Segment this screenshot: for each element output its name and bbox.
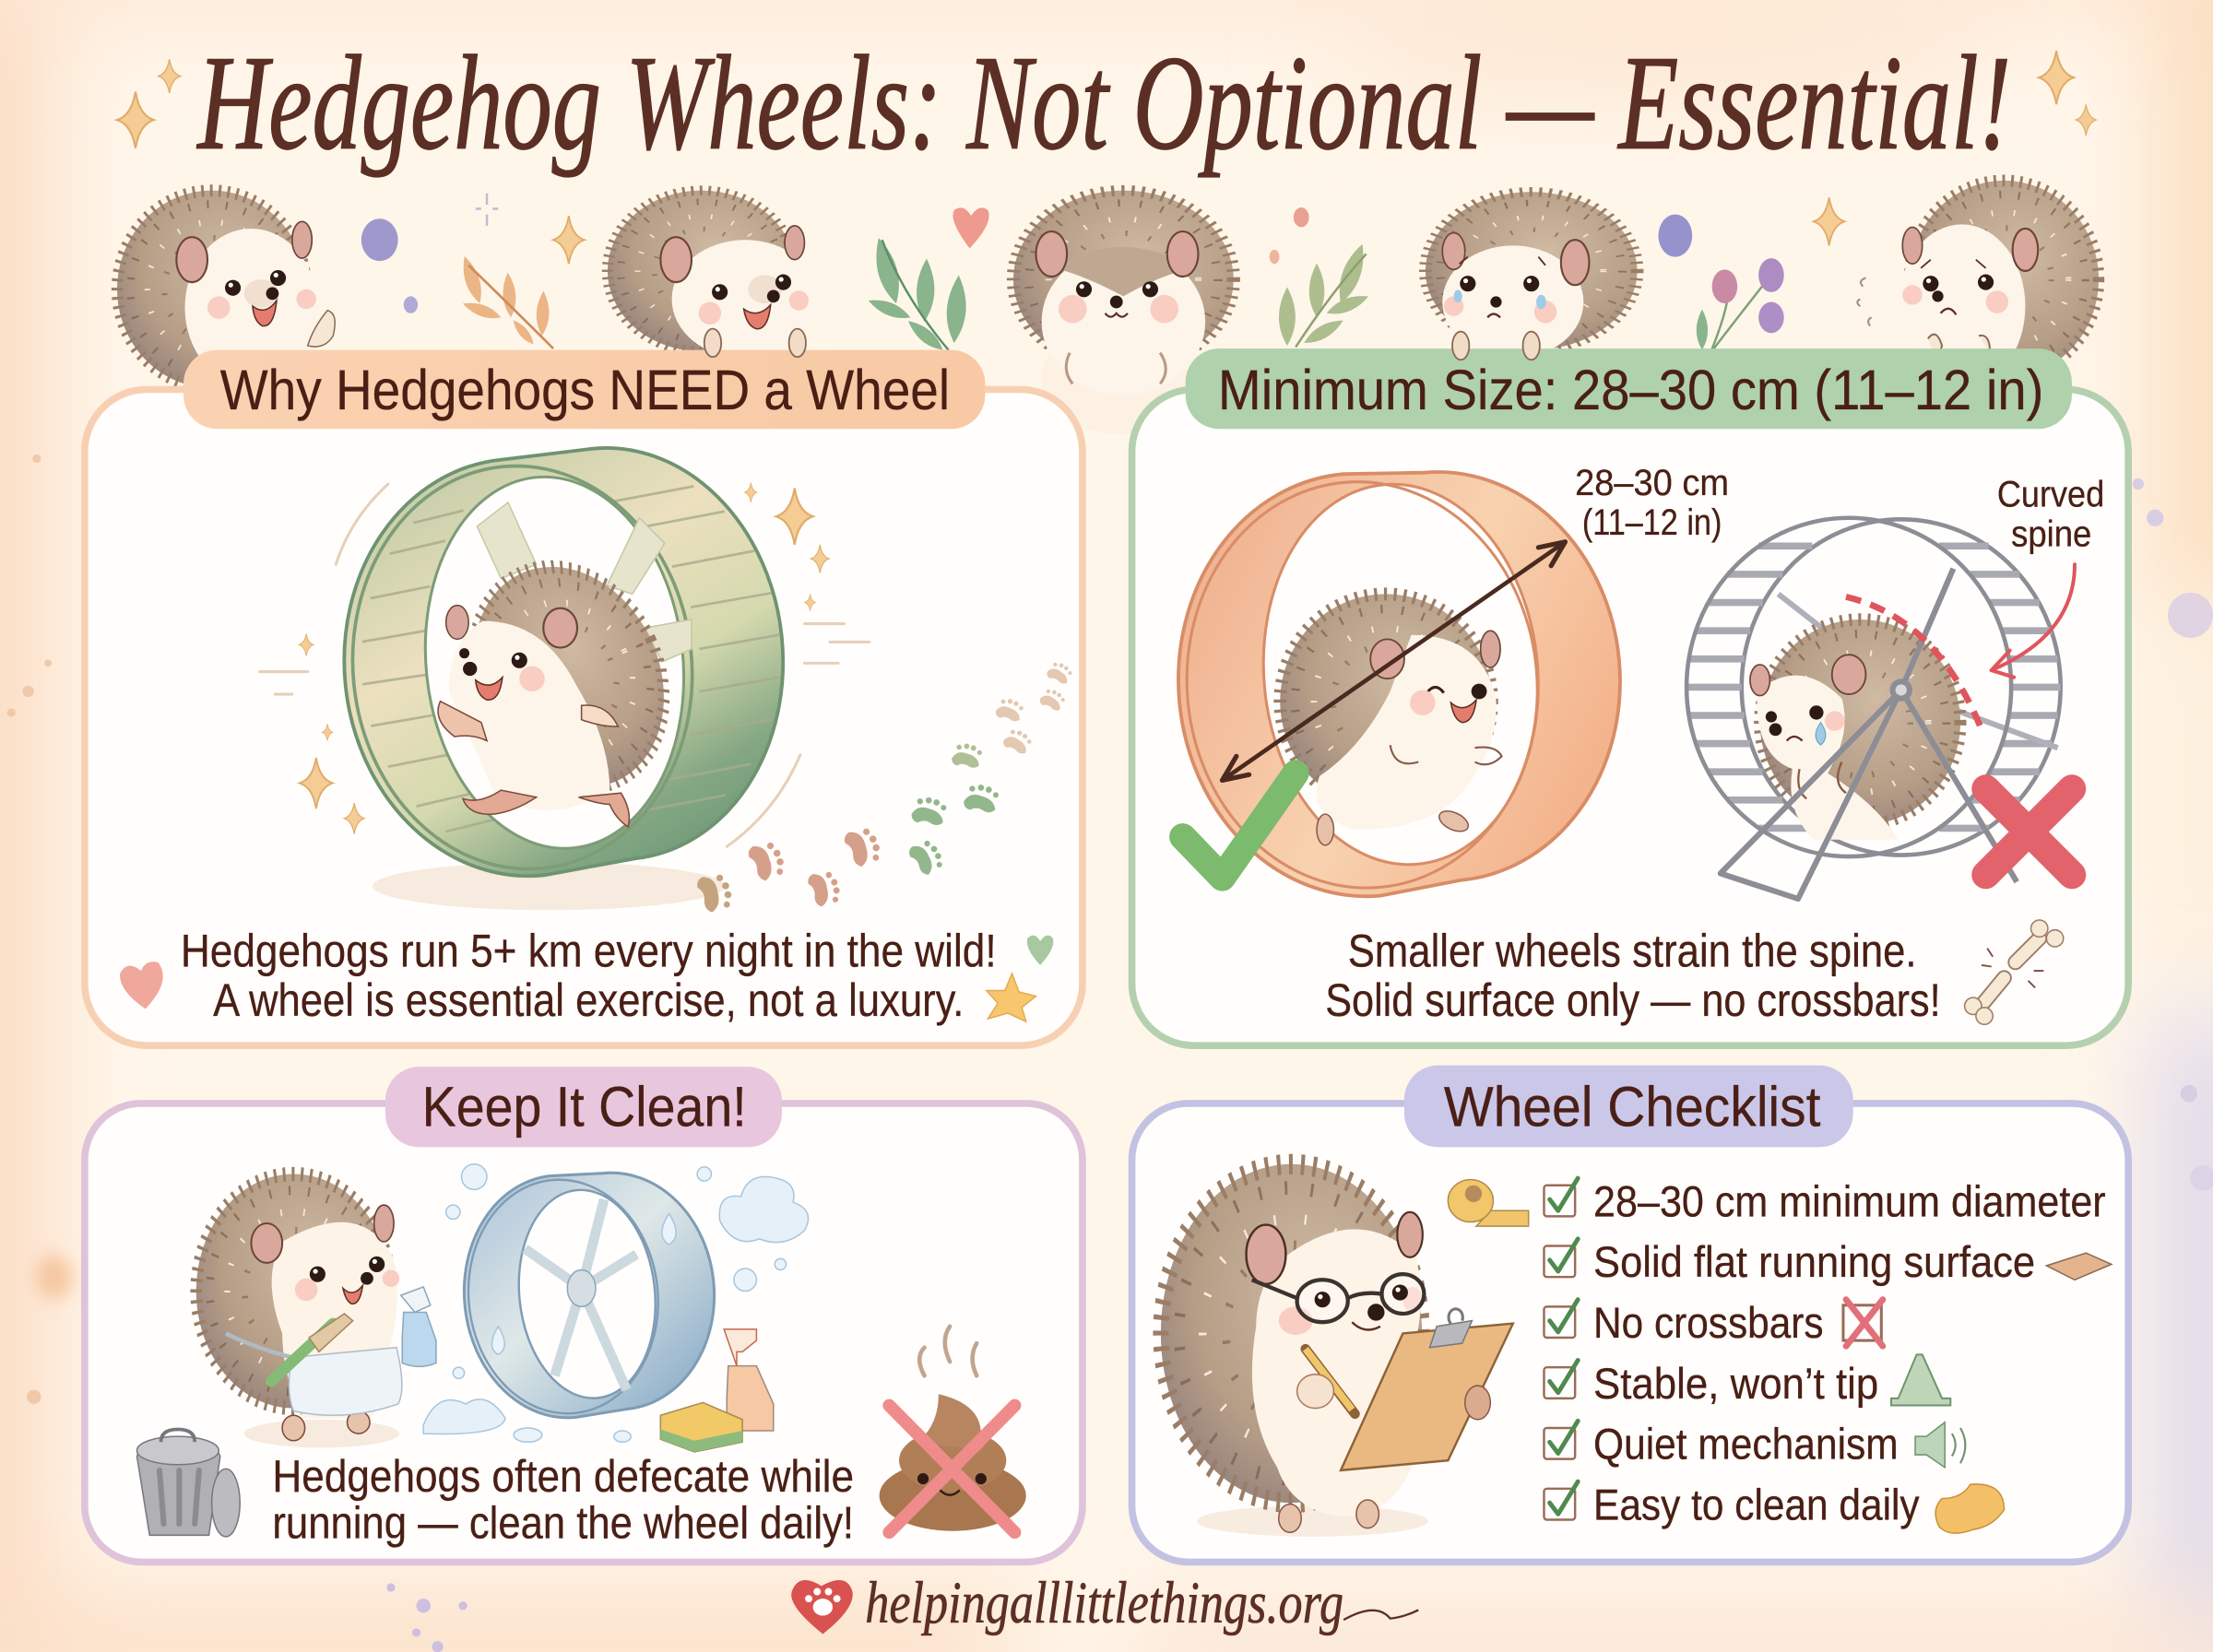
foam cloud	[719, 1176, 809, 1243]
wheel spokes	[477, 502, 692, 662]
apron	[289, 1348, 402, 1415]
panel: keep it clean	[85, 1103, 1083, 1562]
icon: crossed-out bars	[1843, 1300, 1883, 1346]
heading: wheel checklist	[1404, 1066, 1853, 1147]
red cross	[1986, 789, 2072, 875]
check mark	[1183, 773, 1296, 878]
bubbles and droplets	[446, 1164, 787, 1442]
illustration: clean blue wheel	[423, 1160, 809, 1452]
hedgehog 2: happy	[608, 191, 819, 359]
pencil	[1306, 1349, 1355, 1414]
item 1: 28–30 cm minimum diameter	[1593, 1177, 2106, 1226]
icon: tape measure	[1448, 1180, 1529, 1226]
pointer arrow	[1992, 564, 2075, 678]
illustration: cleaning hedgehog	[196, 1174, 436, 1447]
panel: wheel checklist	[1132, 1103, 2128, 1562]
curved spine label: spine	[2011, 513, 2091, 554]
curved spine label: Curved	[1997, 474, 2104, 514]
text: spine warning	[1325, 924, 1941, 1026]
size label: 28–30 cm	[1575, 463, 1729, 503]
item 6: Easy to clean daily	[1593, 1481, 1920, 1529]
illustration: hedgehog running in green wheel	[324, 431, 804, 910]
hedgehog 3: centre	[1013, 191, 1234, 434]
heading: wheel checklist: Wheel Checklist	[1444, 1075, 1820, 1138]
wheel stand	[1721, 569, 2017, 899]
icon: stable stand	[1891, 1354, 1950, 1405]
dashed spine curve	[1846, 596, 1982, 729]
icon: broken bone	[1965, 920, 2064, 1024]
illustration: small metal wheel with sad hedgehog	[1686, 518, 2075, 899]
size label: (11–12 in)	[1582, 502, 1722, 543]
item 3: No crossbars	[1593, 1299, 1824, 1348]
text: spine warning: Smaller wheels strain the spine.	[1348, 924, 1917, 976]
size label	[1575, 463, 1729, 543]
panel: why hedgehogs need a wheel	[85, 389, 1083, 1045]
text: defecate warning	[272, 1452, 854, 1548]
text: spine warning: Solid surface only — no crossbars!	[1325, 974, 1941, 1026]
paws over headings	[704, 329, 1540, 360]
cleaner bottle and sponge	[727, 1366, 774, 1431]
checklist	[1544, 1177, 2106, 1529]
illustration: hedgehog with clipboard	[1161, 1164, 1513, 1537]
glasses	[1252, 1274, 1424, 1322]
icon: paw heart	[791, 1580, 853, 1634]
text: defecate warning: Hedgehogs often defecate while	[272, 1452, 854, 1502]
hedgehog 1: waving	[117, 191, 335, 388]
illustration: large peach wheel with happy hedgehog	[1161, 452, 1638, 912]
curved spine label	[1997, 474, 2104, 554]
text: wheel exercise: A wheel is essential exercise, not a luxury.	[213, 974, 964, 1026]
text: defecate warning: running — clean the wheel daily!	[272, 1498, 854, 1548]
hedgehog 4: sad	[1426, 192, 1638, 359]
heading: minimum size: Minimum Size: 28–30 cm (11–12 in)	[1218, 359, 2043, 421]
text: wheel exercise	[181, 924, 997, 1026]
item 5: Quiet mechanism	[1593, 1421, 1899, 1469]
heading: keep it clean: Keep It Clean!	[422, 1075, 747, 1138]
item 2: Solid flat running surface	[1593, 1238, 2035, 1287]
icon: yellow sponge	[1935, 1484, 2004, 1533]
hedgehog 5: worried	[1899, 181, 2099, 388]
sparkles and speed lines	[260, 482, 870, 846]
icons: heart, leaf heart, star	[120, 936, 1053, 1021]
brush	[271, 1324, 333, 1381]
website footer: helpingalllittlethings.org	[865, 1570, 1343, 1635]
heading: why hedgehogs need a wheel: Why Hedgehogs NEED a Wheel	[220, 359, 950, 421]
footprints	[695, 659, 1074, 914]
decorative plants, berries and sparkles	[361, 194, 1872, 355]
running hedgehog	[438, 536, 699, 827]
icon: crossed-out poop	[880, 1327, 1026, 1532]
icon: flat plank	[2046, 1253, 2112, 1280]
green wheel	[324, 431, 804, 893]
happy hedgehog	[1280, 594, 1502, 845]
spray bottle	[402, 1312, 436, 1366]
diameter arrow	[1223, 542, 1565, 780]
icon: trash can	[136, 1430, 240, 1537]
item 4: Stable, won’t tip	[1593, 1360, 1878, 1409]
title sparkles	[117, 51, 2096, 148]
panel: minimum size	[1132, 389, 2128, 1045]
sad hedgehog	[1750, 620, 1960, 840]
icon: quiet speaker	[1915, 1422, 1965, 1468]
clipboard	[1341, 1324, 1513, 1470]
text: wheel exercise: Hedgehogs run 5+ km every night in the wild!	[181, 924, 997, 976]
